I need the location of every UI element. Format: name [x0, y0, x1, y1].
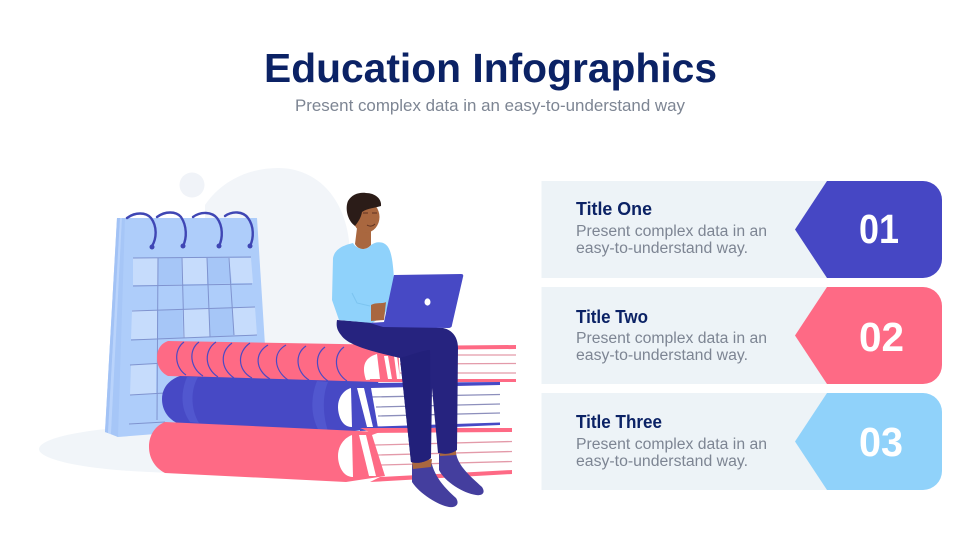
panel: card one [542, 181, 942, 278]
hand [371, 302, 386, 321]
calendar rings [127, 212, 253, 246]
card text: Present complex data in an [576, 436, 767, 453]
ground shadow [39, 425, 341, 473]
background blob [205, 168, 350, 400]
book: top pink [157, 341, 516, 382]
illustration: student on books [39, 168, 516, 507]
number 03: 03 [859, 419, 903, 465]
card background [542, 181, 832, 278]
torso and arm [332, 242, 394, 323]
panel: card three [542, 393, 942, 490]
subtitle: Present complex data in an easy-to-understand way [295, 96, 685, 115]
card background [542, 287, 832, 384]
socks [412, 461, 458, 507]
background small circle [180, 172, 204, 198]
card heading: Title Three [576, 412, 662, 432]
person [332, 193, 484, 507]
title: Education Infographics [264, 45, 717, 91]
head [352, 202, 380, 232]
neck [355, 228, 371, 249]
legs [337, 320, 458, 463]
card text: Present complex data in an [576, 330, 767, 347]
arrow tag 02 [795, 287, 942, 384]
ankles [412, 459, 432, 469]
icon: calendar [105, 212, 270, 437]
number 01: 01 [859, 206, 899, 252]
card heading: Title Two [576, 307, 648, 327]
panel: card two [542, 287, 942, 384]
card text: easy-to-understand way. [576, 453, 748, 470]
card text: easy-to-understand way. [576, 240, 748, 257]
arrow tag 01 [795, 181, 942, 278]
hair [347, 193, 381, 226]
card heading: Title One [576, 199, 652, 219]
arrow tag 03 [795, 393, 942, 490]
book: middle blue [162, 376, 500, 432]
icon: laptop [370, 274, 463, 328]
book: bottom pink [149, 422, 512, 482]
card text: Present complex data in an [576, 223, 767, 240]
card text: easy-to-understand way. [576, 347, 748, 364]
face details [363, 213, 377, 226]
card background [542, 393, 832, 490]
number 02: 02 [859, 314, 904, 360]
